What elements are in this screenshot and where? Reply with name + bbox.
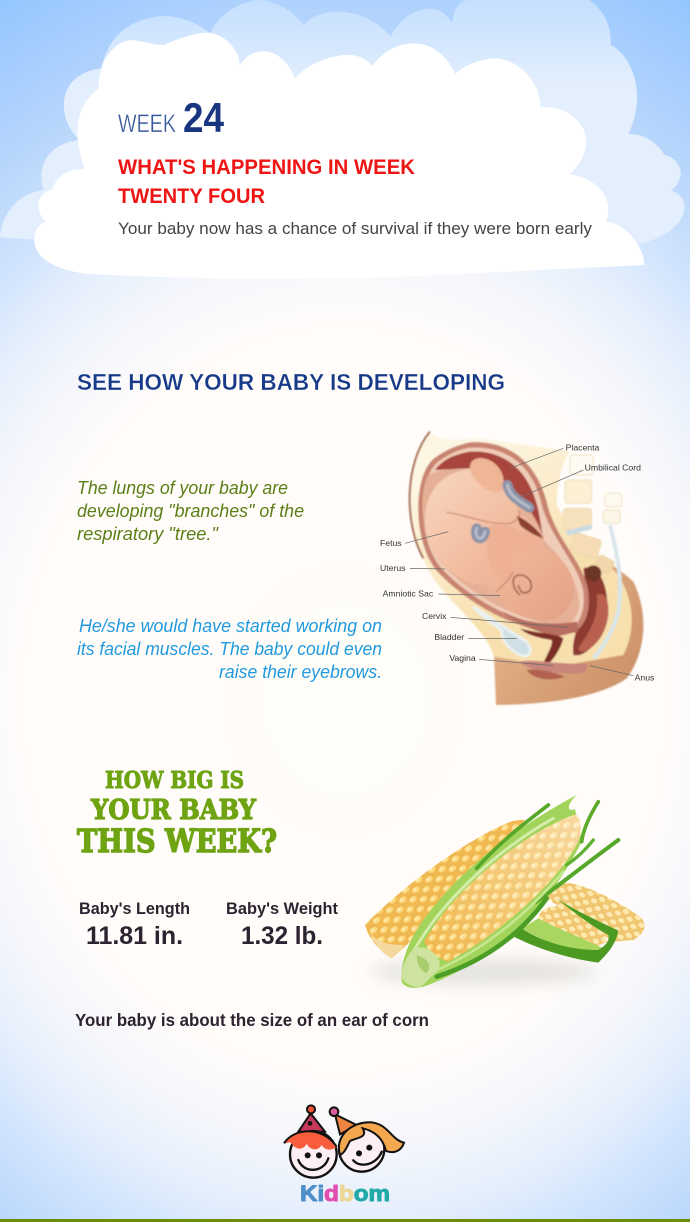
stat: baby's weight: Baby's Weight: [226, 899, 338, 918]
text: facial muscles: [77, 615, 382, 682]
footer bar: [0, 1219, 690, 1222]
boy head: [290, 1131, 337, 1178]
week label: [118, 94, 225, 141]
wordmark: Kidbom: [300, 1181, 390, 1206]
size comparison text: Your baby is about the size of an ear of corn: [75, 1010, 429, 1030]
husk leaves: [413, 802, 618, 977]
anatomy labels: Anus: [635, 672, 655, 682]
text: facial muscles: He/she would have started working on: [79, 615, 382, 636]
text: lungs: The lungs of your baby are: [77, 477, 288, 498]
stat: baby's length: [79, 899, 190, 950]
anatomy labels: Vagina: [449, 653, 476, 663]
anatomy labels: Umbilical Cord: [585, 462, 641, 472]
uterus wall: [418, 442, 589, 634]
left back ear: [365, 820, 525, 958]
stat: baby's length: 11.81 in.: [86, 922, 183, 950]
anatomy labels: Bladder: [434, 632, 464, 642]
anatomy labels: Fetus: [380, 538, 402, 548]
week label: WEEK: [118, 110, 176, 138]
illustration: ears of corn: [365, 795, 645, 988]
girl face: [356, 1145, 372, 1156]
boy hair: [284, 1131, 337, 1150]
right back ear: [547, 883, 645, 942]
corn shadow: [370, 958, 597, 985]
girl hair: [339, 1122, 404, 1155]
cloud: back layer: [0, 0, 684, 267]
heading: how big is your baby: HOW BIG IS: [105, 766, 244, 794]
text: lungs: [77, 477, 304, 544]
ear: [513, 575, 531, 595]
right small ear: [533, 906, 608, 948]
heading: what's happening: TWENTY FOUR: [118, 184, 265, 208]
husk stem: [401, 947, 440, 987]
face: [514, 539, 541, 553]
bowel: [573, 567, 607, 655]
text: lungs: respiratory "tree.": [77, 523, 219, 544]
lower body skin: [494, 512, 643, 705]
main ear husk base: [402, 795, 582, 988]
cervix: [503, 612, 578, 637]
belly wall line: [410, 432, 430, 558]
heading: how big is your baby: THIS WEEK?: [77, 823, 277, 860]
stat: baby's weight: [226, 899, 338, 950]
week label: 24: [183, 94, 225, 141]
anatomy labels: Placenta: [566, 442, 600, 452]
text: facial muscles: raise their eyebrows.: [219, 661, 382, 682]
boy face: [305, 1152, 322, 1158]
anatomy labels: [380, 442, 655, 682]
fetus foot: [470, 458, 504, 492]
illustration: fetus in womb: [380, 432, 655, 705]
spine: [563, 455, 622, 575]
text: facial muscles: its facial muscles. The baby could even: [77, 638, 382, 659]
text: lungs: developing "branches" of the: [77, 500, 304, 521]
heading: development: SEE HOW YOUR BABY IS DEVELOPING: [77, 369, 505, 395]
girl head: [339, 1126, 384, 1172]
vagina: [520, 628, 563, 670]
bladder: [473, 607, 530, 656]
heading: what's happening: WHAT'S HAPPENING IN WEEK: [118, 155, 415, 179]
heading: how big is your baby: YOUR BABY: [90, 794, 256, 826]
girl hat: [330, 1107, 357, 1134]
cream fat layer: [410, 432, 632, 667]
cloud: front white panel: [34, 33, 645, 279]
fetus body: [425, 470, 574, 621]
stat: baby's length: Baby's Length: [79, 899, 190, 918]
fetus arm and hand: [487, 524, 544, 578]
inner lining: [423, 448, 584, 629]
anatomy labels: Uterus: [380, 563, 406, 573]
leader lines: [405, 448, 633, 676]
umbilical cord: [476, 485, 529, 538]
anatomy labels: Cervix: [422, 611, 447, 621]
boy hat: [298, 1105, 325, 1132]
amniotic space: [422, 469, 579, 625]
heading: what's happening: [118, 155, 415, 208]
logo: Kidbom: [284, 1105, 404, 1206]
main ear kernels: [424, 814, 581, 962]
heading: how big is your baby: [77, 766, 277, 860]
stat: baby's weight: 1.32 lb.: [241, 922, 323, 950]
anatomy labels: Amniotic Sac: [383, 588, 434, 598]
placenta: [435, 452, 543, 538]
intro text: Your baby now has a chance of survival if they were born early: [118, 219, 592, 238]
